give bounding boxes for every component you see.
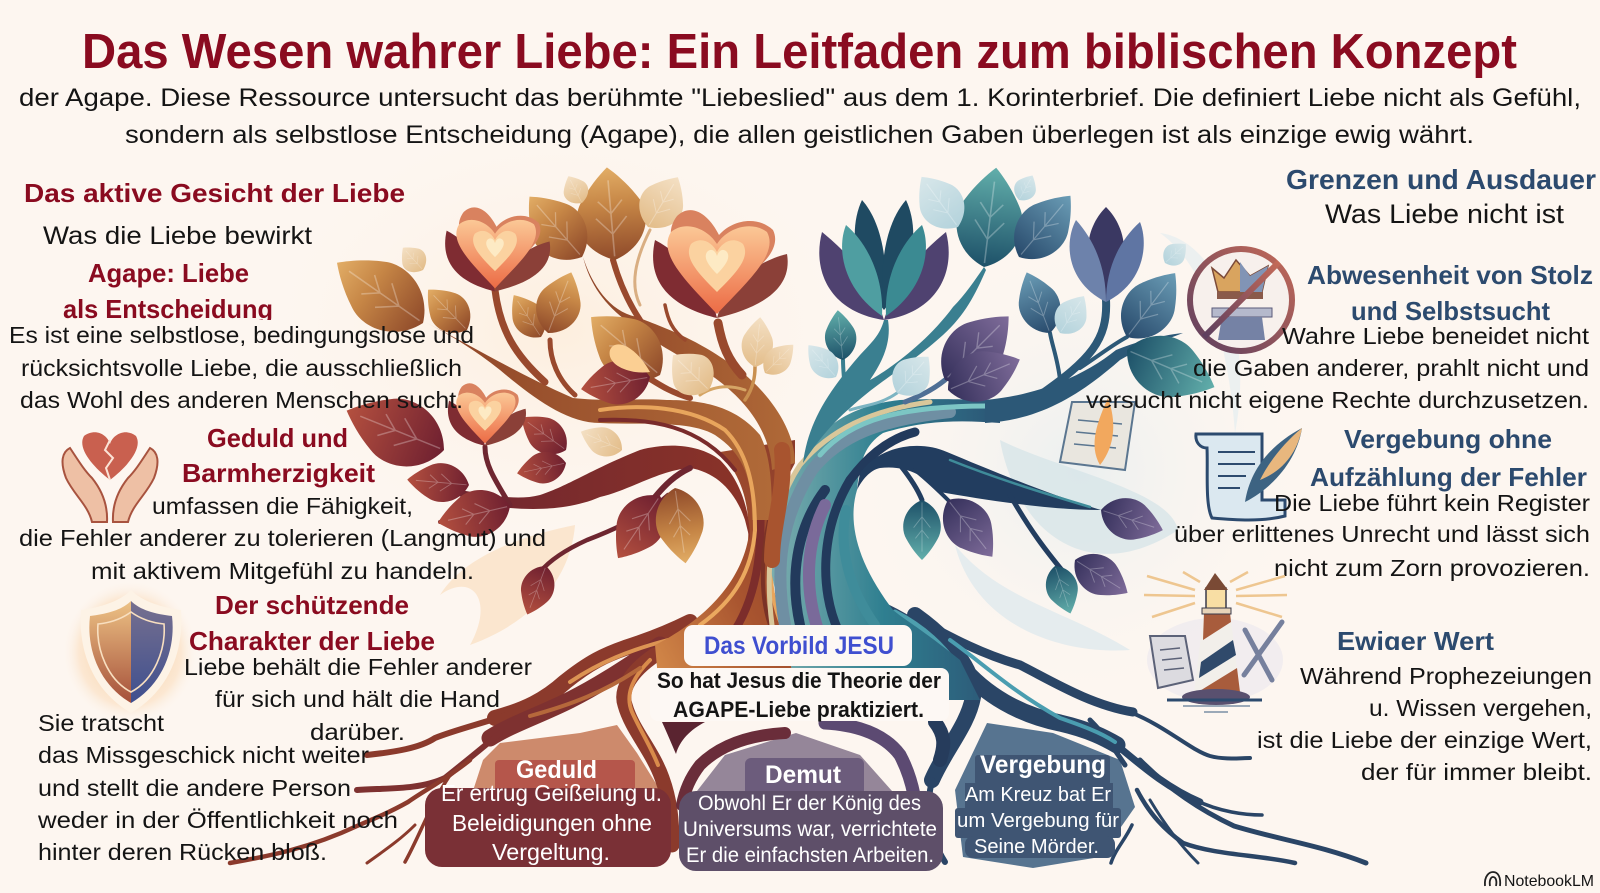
heading: pride [1308, 265, 1592, 320]
text: gossip: das Missgeschick nicht weiter [38, 742, 369, 768]
text: eternal value: u. Wissen vergehen, [1369, 695, 1592, 721]
card: Vergebung: um Vergebung für [957, 810, 1119, 832]
card: Vergebung: Am Kreuz bat Er [965, 784, 1111, 806]
main branch [985, 333, 1183, 423]
card: Geduld: Beleidigungen ohne [452, 810, 652, 836]
text: how Jesus practiced: AGAPE-Liebe praktiziert. [673, 697, 924, 722]
heading: limits: Grenzen und Ausdauer [1286, 164, 1596, 195]
panel: example of Jesus [425, 625, 1121, 871]
heading: pride: und Selbstsucht [1351, 296, 1550, 326]
twigs [440, 230, 783, 572]
text: patience: mit aktivem Mitgefühl zu handeln. [91, 558, 474, 584]
icon: no pride crown [1190, 249, 1292, 351]
title: Das Wesen wahrer Liebe: Ein Leitfaden zum biblischen Konzept [82, 25, 1517, 79]
roots left [230, 622, 785, 863]
subheading: Was die Liebe bewirkt [43, 222, 312, 250]
text: forgiveness [1174, 490, 1590, 581]
card: Vergebung: Seine Mörder. [974, 836, 1099, 858]
card: Demut: Universums war, verrichtete [683, 818, 937, 841]
upper branch [803, 267, 986, 463]
card: Demut: Demut [765, 761, 842, 789]
text: gossip: hinter deren Rücken bloß. [38, 839, 327, 865]
text: gossip: und stellt die andere Person [38, 775, 351, 801]
label: Das Vorbild JESU: Das Vorbild JESU [704, 632, 894, 660]
leaves left crown [318, 164, 802, 620]
heading: eternal value: Ewiger Wert [1337, 626, 1494, 656]
trunk left half [655, 440, 796, 700]
card: Demut [679, 758, 943, 871]
card: Geduld: Vergeltung. [492, 839, 610, 865]
text: gossip: Sie tratscht [38, 710, 165, 736]
text: protective character: Liebe behält die Fehler anderer [184, 654, 532, 680]
text: agape: rücksichtsvolle Liebe, die ausschließlich [21, 355, 462, 381]
text: eternal value: ist die Liebe der einzige Wert, [1257, 727, 1592, 753]
heading: patience: Barmherzigkeit [182, 458, 375, 488]
trunk right half [767, 399, 1000, 700]
text: patience [19, 493, 546, 584]
purple bud [1070, 207, 1144, 302]
card: Vergebung: Vergebung [980, 751, 1106, 779]
text: eternal value [1257, 663, 1592, 785]
main branch [427, 323, 772, 520]
text: forgiveness: nicht zum Zorn provozieren. [1274, 555, 1590, 581]
text: patience: umfassen die Fähigkeit, [152, 493, 413, 519]
text: protective character [184, 654, 532, 745]
text: agape [9, 322, 474, 413]
rocks under roots [470, 723, 1135, 868]
card: Geduld: Er ertrug Geißelung u. [441, 780, 662, 806]
text: agape: das Wohl des anderen Menschen sucht. [20, 387, 463, 413]
text: how Jesus practiced [650, 668, 949, 722]
upper branch [583, 257, 795, 470]
heading: forgiveness [1310, 424, 1587, 492]
heading: forgiveness: Aufzählung der Fehler [1310, 462, 1587, 492]
icon: shield [62, 580, 198, 724]
text: pride: versucht nicht eigene Rechte durchzusetzen. [1086, 387, 1589, 413]
icon: hands holding broken heart [63, 432, 157, 522]
branches right [803, 267, 1183, 580]
illustration: tree of love [230, 164, 1366, 868]
label: Das Vorbild JESU [684, 625, 912, 666]
subtitle: sondern als selbstlose Entscheidung (Agape), die allen geistlichen Gaben überlegen ist als einzige ewig währt. [125, 121, 1474, 149]
text: gossip: weder in der Öffentlichkeit noch [37, 807, 398, 833]
text: pride: Wahre Liebe beneidet nicht [1282, 323, 1589, 349]
subtitle: der Agape. Diese Ressource untersucht das berühmte "Liebeslied" aus dem 1. Korinterbrief. Die definiert Liebe nicht als Gefühl, [19, 84, 1581, 112]
watermark: NotebookLM: NotebookLM [1504, 873, 1594, 890]
text: patience: die Fehler anderer zu tolerieren (Langmut) und [19, 525, 546, 551]
subheading: Was Liebe nicht ist [1325, 199, 1565, 229]
text: protective character: für sich und hält die Hand [215, 686, 500, 712]
card: Vergebung [955, 751, 1121, 858]
text: protective character: darüber. [310, 719, 405, 745]
text: pride [1086, 323, 1589, 413]
wisps behind the tree [440, 233, 1240, 651]
heading: protective character: Der schützende [215, 590, 409, 620]
branches left [427, 230, 795, 572]
icon: scroll and quill [1196, 428, 1302, 520]
twigs [843, 300, 1127, 580]
panel: limits and endurance [1086, 164, 1596, 785]
text: eternal value: Während Prophezeiungen [1300, 663, 1592, 689]
leaves right crown [799, 164, 1226, 618]
text: pride: die Gaben anderer, prahlt nicht und [1193, 355, 1589, 381]
heading: forgiveness: Vergebung ohne [1344, 424, 1552, 454]
text: forgiveness: Die Liebe führt kein Register [1274, 490, 1590, 516]
text: gossip [37, 710, 398, 865]
text: how Jesus practiced: So hat Jesus die Theorie der [657, 668, 941, 693]
lower branch [857, 446, 1101, 510]
heading: patience [182, 423, 375, 488]
card: Demut: Obwohl Er der König des [698, 792, 921, 815]
heading: agape: Agape: Liebe [88, 258, 249, 288]
card: Geduld [425, 756, 671, 867]
icon: burning page on branch [1060, 398, 1135, 470]
card: Demut: Er die einfachsten Arbeiten. [686, 844, 934, 867]
bud on small branch [572, 294, 679, 411]
card: Geduld: Geduld [516, 756, 597, 784]
heading: active face: Das aktive Gesicht der Liebe [24, 178, 405, 208]
lower branch [434, 446, 750, 540]
roots right [825, 610, 1366, 863]
text: eternal value: der für immer bleibt. [1361, 759, 1592, 785]
subtitle [19, 84, 1581, 149]
text: forgiveness: über erlittenes Unrecht und lässt sich [1174, 521, 1590, 547]
text: agape: Es ist eine selbstlose, bedingungslose und [9, 322, 474, 348]
heading: agape: als Entscheidung [63, 294, 273, 324]
heading: patience: Geduld und [207, 423, 348, 453]
panel: the active face of love [9, 178, 546, 865]
heading: protective character: Charakter der Liebe [189, 626, 435, 656]
heading: protective character [189, 590, 435, 656]
icon: lighthouse with scroll and tools [1144, 572, 1287, 712]
heading: pride: Abwesenheit von Stolz [1307, 260, 1593, 290]
heading: agape [64, 263, 272, 320]
